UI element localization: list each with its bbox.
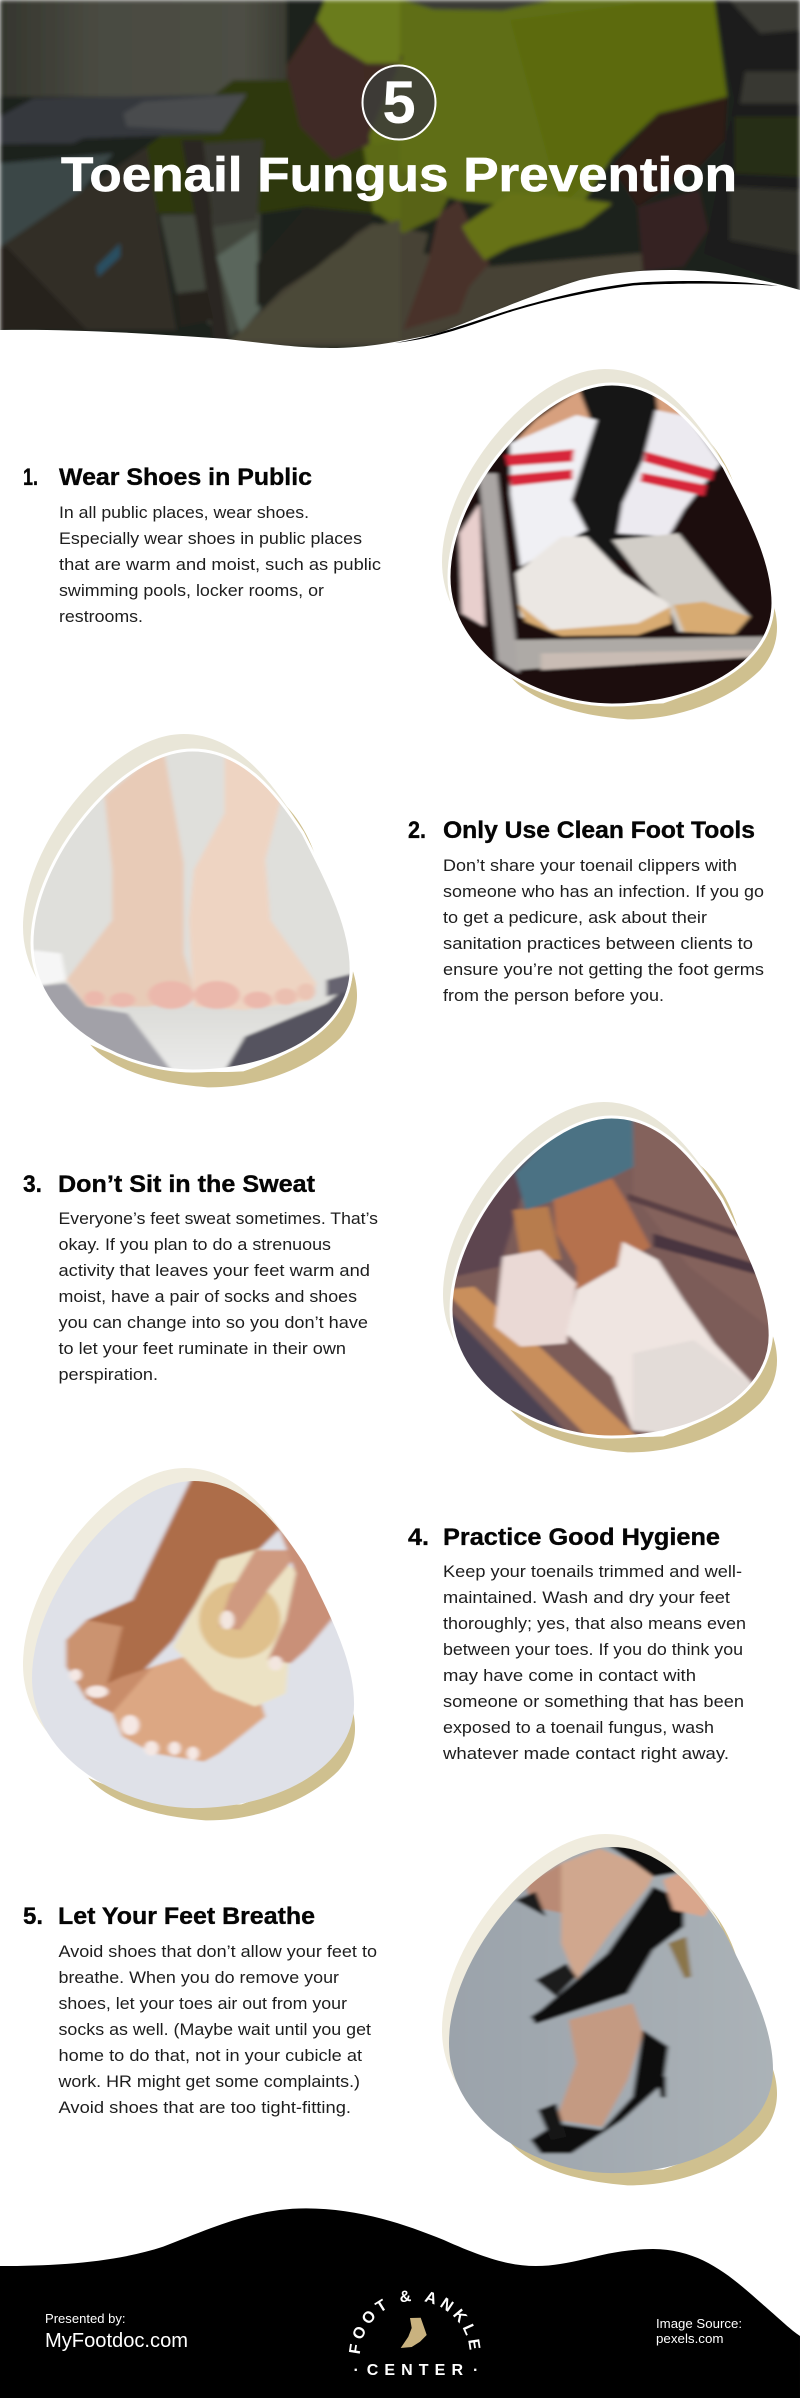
tip 2 body: someone who has an infection. If you go	[443, 883, 764, 901]
tip 1 body: swimming pools, locker rooms, or	[59, 582, 325, 600]
presented by: Presented by:	[45, 2311, 126, 2326]
logo center text: ·	[473, 2362, 478, 2379]
tip 1 body: that are warm and moist, such as public	[59, 556, 381, 574]
tip 4 body	[442, 1563, 746, 1763]
white wave divider	[0, 270, 800, 360]
tip 3 body: perspiration.	[58, 1366, 158, 1384]
footer band	[0, 2208, 800, 2398]
tip 1 body	[59, 504, 381, 626]
tip 5 body: home to do that, not in your cubicle at	[58, 2047, 362, 2065]
tip 2 heading: 2.	[408, 817, 426, 844]
image source: Image Source:	[656, 2316, 742, 2331]
tip 4 body: Keep your toenails trimmed and well-	[443, 1563, 742, 1581]
tip 4 body: someone or something that has been	[443, 1693, 744, 1711]
presented by	[45, 2311, 188, 2352]
tip 5 body	[57, 1943, 377, 2117]
tip 3 body: activity that leaves your feet warm and	[58, 1262, 370, 1280]
tip 2 body: Don’t share your toenail clippers with	[443, 857, 737, 875]
tip 3 body: okay. If you plan to do a strenuous	[58, 1236, 331, 1254]
tip 2 body	[443, 857, 764, 1005]
tip 3 text	[23, 1171, 378, 1384]
tip 4 image blob: feet with loofah	[10, 1467, 378, 1820]
tip 5 heading: Let Your Feet Breathe	[58, 1903, 315, 1930]
title: Toenail Fungus Prevention	[61, 149, 737, 202]
tip 5 body: socks as well. (Maybe wait until you get	[58, 2021, 371, 2039]
tip 2 image blob: bare feet	[10, 733, 378, 1087]
tip 3 heading: Don’t Sit in the Sweat	[58, 1171, 315, 1198]
icon: foot	[401, 2318, 427, 2348]
tip 4 body: whatever made contact right away.	[442, 1745, 729, 1763]
logo	[348, 2290, 480, 2379]
tip 5 body: Avoid shoes that don’t allow your feet to	[58, 1943, 377, 1961]
tip 3 body: you can change into so you don’t have	[58, 1314, 368, 1332]
tip 3 image blob: white sneakers	[443, 1102, 777, 1452]
tip 2 body: from the person before you.	[443, 987, 664, 1005]
tip 2 body: sanitation practices between clients to	[443, 935, 753, 953]
tip 5 body: Avoid shoes that are too tight-fitting.	[58, 2099, 351, 2117]
number badge	[362, 66, 436, 140]
presented by: MyFootdoc.com	[45, 2330, 188, 2352]
tip 4 body: maintained. Wash and dry your feet	[443, 1589, 730, 1607]
tip 3 body	[58, 1210, 378, 1384]
tip 2 text	[408, 817, 764, 1005]
tip 1 body: restrooms.	[59, 608, 143, 626]
tip 4 text	[408, 1524, 746, 1763]
logo center text: CENTER	[367, 2362, 463, 2379]
hero header	[0, 0, 800, 360]
hero photo: toenail treatment	[0, 0, 800, 360]
tip 4 heading: 4.	[408, 1524, 429, 1551]
tip 4 body: may have come in contact with	[443, 1667, 696, 1685]
tip 4 heading: Practice Good Hygiene	[443, 1524, 720, 1551]
tip 5 text	[23, 1903, 377, 2117]
tip 2 body: ensure you’re not getting the foot germs	[443, 961, 764, 979]
tip 1 image blob: socks and sneakers	[429, 369, 796, 723]
tip 4 body: between your toes. If you do think you	[443, 1641, 743, 1659]
tip 1 text	[23, 464, 381, 626]
tip 5 body: breathe. When you do remove your	[58, 1969, 340, 1987]
tip 3 body: Everyone’s feet sweat sometimes. That’s	[58, 1210, 378, 1228]
image source	[656, 2316, 742, 2346]
tip 1 heading: 1.	[23, 464, 38, 491]
tip 5 image blob: black high heels	[429, 1833, 796, 2187]
image source: pexels.com	[656, 2331, 724, 2346]
tip 4 body: exposed to a toenail fungus, wash	[443, 1719, 714, 1737]
tip 1 body: Especially wear shoes in public places	[59, 530, 362, 548]
tip 5 body: work. HR might get some complaints.)	[57, 2073, 360, 2091]
tip 3 body: to let your feet ruminate in their own	[58, 1340, 346, 1358]
tip 1 body: In all public places, wear shoes.	[59, 504, 309, 522]
tip 2 body: to get a pedicure, ask about their	[443, 909, 708, 927]
tip 3 heading: 3.	[23, 1171, 42, 1198]
tip 5 body: shoes, let your toes air out from your	[58, 1995, 348, 2013]
tip 3 body: moist, have a pair of socks and shoes	[58, 1288, 357, 1306]
tip 1 heading: Wear Shoes in Public	[59, 464, 312, 491]
footer wave	[0, 2208, 800, 2398]
tip 2 heading: Only Use Clean Foot Tools	[443, 817, 755, 844]
logo center text: ·	[354, 2362, 359, 2379]
number badge: 5	[382, 69, 416, 136]
tip 5 heading: 5.	[23, 1903, 43, 1930]
logo arc text: FOOT & ANKLE	[348, 2290, 480, 2354]
tip 4 body: thoroughly; yes, that also means even	[443, 1615, 746, 1633]
